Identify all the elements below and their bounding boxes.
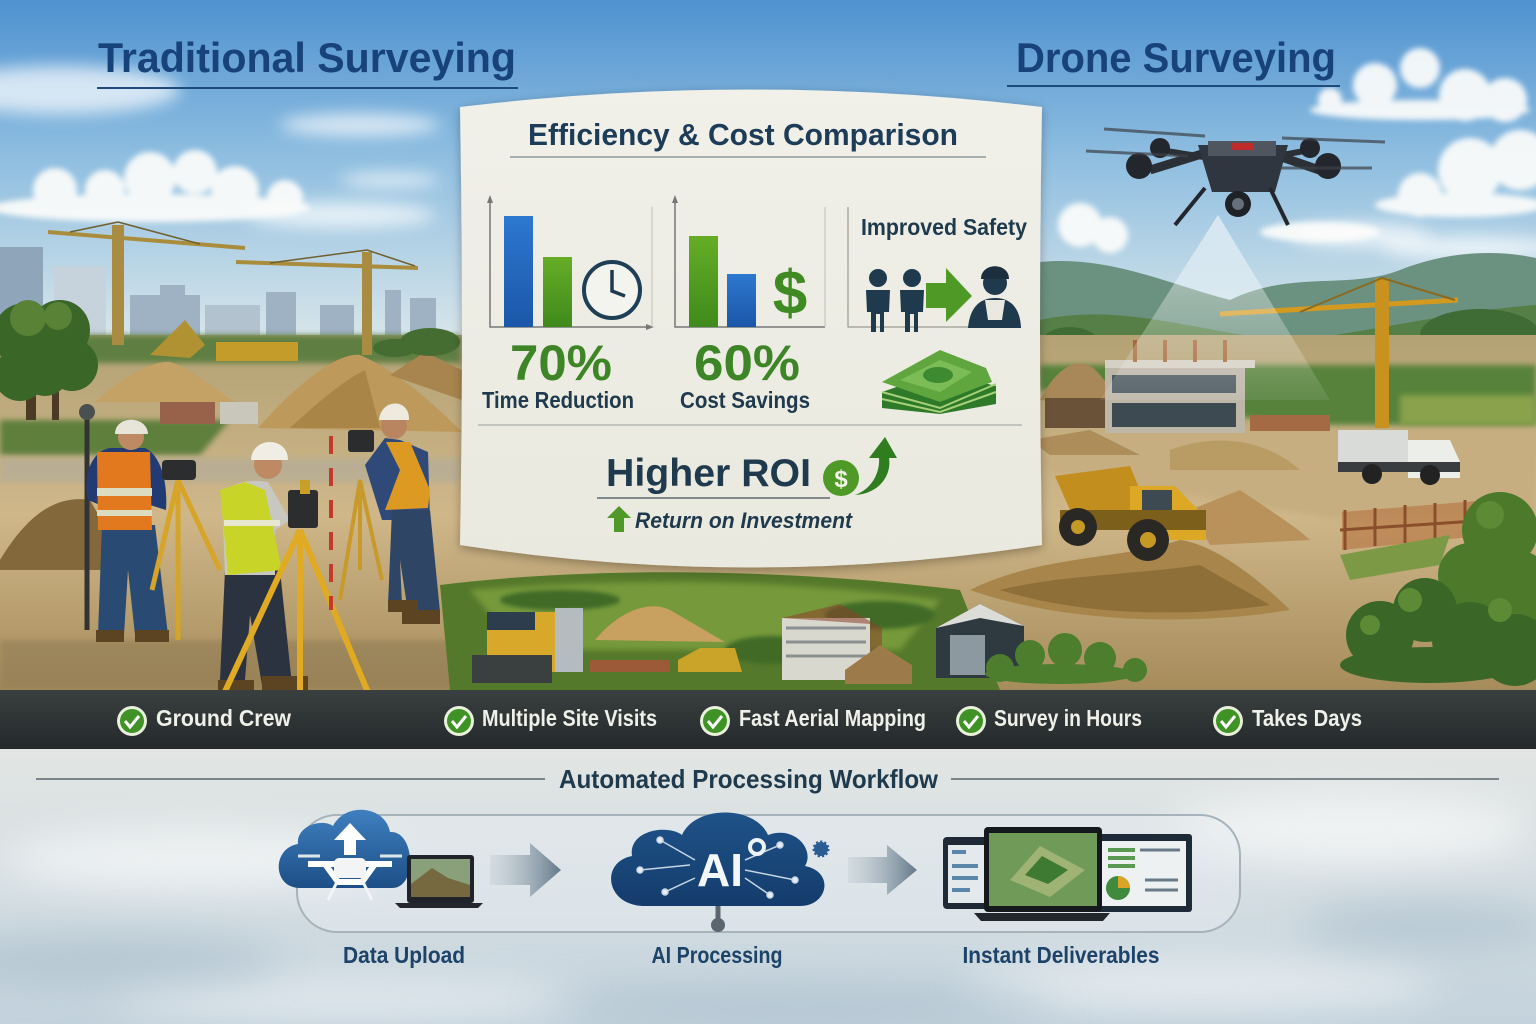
item: ground crew: Ground Crew xyxy=(156,705,291,731)
background: city skyline xyxy=(0,247,436,340)
icon: workers to safe worker xyxy=(866,266,1021,332)
building under construction xyxy=(1045,340,1330,433)
background: distant hills on the drone side xyxy=(1040,253,1536,420)
background: sky xyxy=(0,0,1536,340)
improved safety: Improved Safety xyxy=(861,214,1027,240)
feature strip xyxy=(0,690,1536,749)
stat: 60% cost savings: 60% xyxy=(694,335,800,391)
icon: quadcopter drone xyxy=(1086,129,1385,225)
icon: cloud with drone xyxy=(279,810,410,900)
return on investment: Return on Investment xyxy=(635,508,854,533)
improved safety xyxy=(848,207,1027,332)
heading: Drone Surveying: Drone Surveying xyxy=(1016,34,1336,81)
panel: efficiency and cost comparison xyxy=(460,90,1042,568)
stat: 70% time reduction xyxy=(482,335,634,413)
item: survey in hours xyxy=(956,705,1142,736)
chart: time reduction xyxy=(487,195,654,330)
step: data upload: Data Upload xyxy=(343,942,465,968)
arrow: AI to deliverables xyxy=(848,845,917,895)
item: takes days xyxy=(1213,705,1362,736)
icon: stack of cash xyxy=(882,350,996,414)
icon: dollar with rising arrow xyxy=(823,437,897,496)
drone scan beam xyxy=(1100,215,1330,400)
left site equipment xyxy=(150,320,298,424)
survey crew: tripod instrument behind xyxy=(152,460,220,640)
left trees xyxy=(0,300,460,420)
step: data upload xyxy=(279,810,483,968)
item: ground crew xyxy=(117,705,291,736)
small buildings at the base of the panel xyxy=(472,604,1147,684)
stat: 60% cost savings: Cost Savings xyxy=(680,387,810,413)
icon: laptop xyxy=(395,855,483,908)
service truck xyxy=(1338,430,1460,485)
item: fast aerial mapping xyxy=(700,705,926,736)
item: multiple site visits: Multiple Site Visits xyxy=(482,705,657,731)
panel heading: Efficiency & Cost Comparison xyxy=(528,117,958,152)
higher ROI xyxy=(597,437,897,498)
right side fence and trees xyxy=(1340,492,1536,686)
dirt mounds xyxy=(0,352,1310,642)
item: multiple site visits xyxy=(444,705,657,736)
item: takes days: Takes Days xyxy=(1252,705,1362,731)
workflow container xyxy=(297,815,1240,932)
stat: 70% time reduction: Time Reduction xyxy=(482,387,634,413)
yellow dump truck xyxy=(1055,466,1206,561)
crane left one xyxy=(48,222,418,355)
survey crew: center worker with total station xyxy=(218,442,372,702)
icon: devices with map xyxy=(943,827,1192,921)
divider xyxy=(478,424,1022,426)
item: fast aerial mapping: Fast Aerial Mapping xyxy=(739,705,926,731)
step: instant deliverables: Instant Deliverables xyxy=(962,942,1160,968)
lower section background xyxy=(0,749,1536,1024)
higher ROI: Higher ROI xyxy=(606,452,811,495)
stat: 70% time reduction: 70% xyxy=(510,335,612,391)
red and white survey stake xyxy=(329,436,333,610)
survey crew: worker at back right xyxy=(340,404,440,624)
step: AI processing: AI Processing xyxy=(652,942,782,968)
step: instant deliverables xyxy=(943,827,1192,968)
step: AI processing xyxy=(611,812,828,968)
heading: automated processing workflow: Automated Processing Workflow xyxy=(559,764,939,794)
heading: Traditional Surveying: Traditional Surveying xyxy=(98,34,516,81)
right crane xyxy=(1220,278,1458,428)
chart: cost savings xyxy=(672,195,825,328)
icon: AI cloud xyxy=(611,812,828,932)
survey crew: worker with pole xyxy=(79,404,169,642)
icon: dollar sign: $ xyxy=(773,259,807,328)
item: survey in hours: Survey in Hours xyxy=(994,705,1142,731)
icon: dollar with rising arrow: $ xyxy=(834,466,848,493)
arrow: upload to AI xyxy=(490,843,561,897)
stat: 60% cost savings xyxy=(680,335,810,413)
icon: clock xyxy=(584,262,640,318)
icon: AI cloud: AI xyxy=(697,844,743,896)
background: construction ground xyxy=(0,335,1536,695)
